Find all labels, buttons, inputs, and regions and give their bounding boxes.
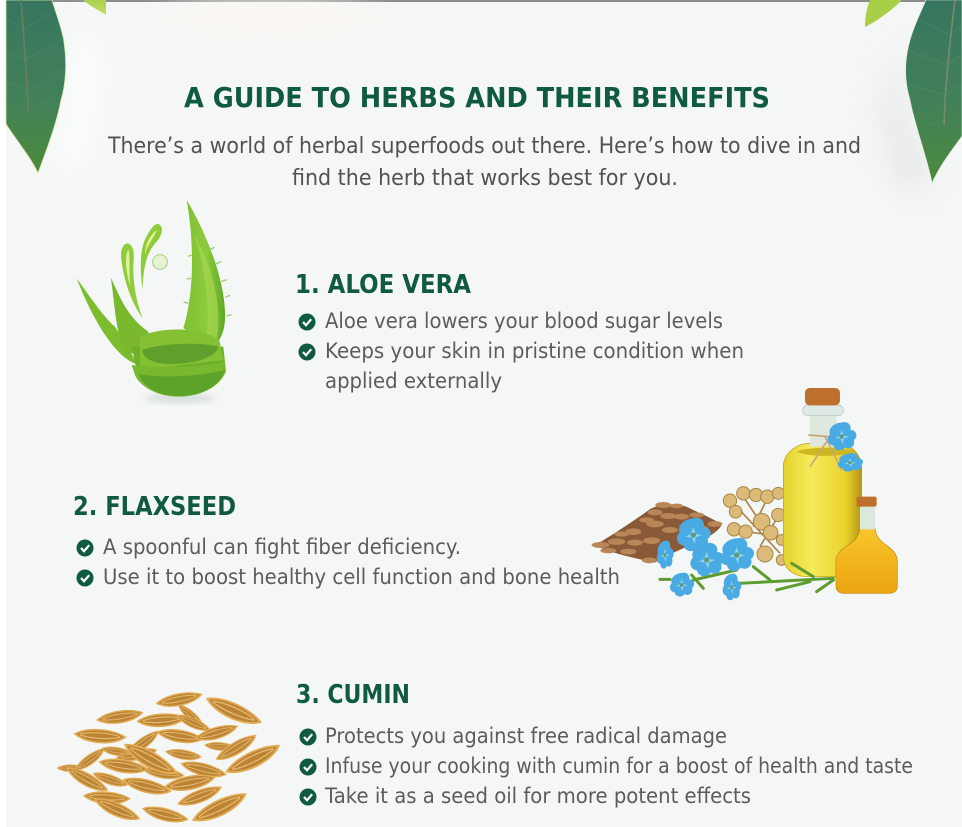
icon: left large leaf [6,0,66,173]
list: aloe vera benefits: applied externally [325,369,502,393]
blue flax flowers [657,422,863,600]
icon: right large leaf [906,0,962,183]
list: aloe vera benefits [298,309,744,393]
icon: aloe vera illustration [77,200,231,402]
heading: aloe vera: 1. ALOE VERA [295,270,471,300]
icon: right small lime leaf [865,0,902,27]
list: cumin benefits: Take it as a seed oil for more potent effects [324,784,751,808]
heading: flaxseed: 2. FLAXSEED [73,492,236,522]
title: A GUIDE TO HERBS AND THEIR BENEFITS [184,81,770,114]
list: flaxseed benefits: Use it to boost healthy cell function and bone health [103,565,620,589]
list: aloe vera benefits: Keeps your skin in pristine condition when [325,339,744,363]
list: aloe vera benefits: Aloe vera lowers your blood sugar levels [325,309,723,333]
heading: cumin: 3. CUMIN [296,680,410,710]
icon: flaxseed and oil illustration [592,388,897,600]
list: cumin benefits [300,724,913,808]
intro text: There’s a world of herbal superfoods out there. Here’s how to dive in and [107,134,861,159]
top header remnant strip [52,0,926,2]
icon: left small lime leaf [83,0,106,15]
small oil bottle [836,497,897,593]
intro text [107,134,861,191]
flax stems [660,563,833,592]
icon: cumin seeds illustration [57,689,284,827]
flaxseed pile [592,502,722,563]
intro text: find the herb that works best for you. [292,166,678,191]
list: flaxseed benefits: A spoonful can fight fiber deficiency. [103,535,461,559]
list: cumin benefits: Infuse your cooking with cumin for a boost of health and taste [325,754,913,778]
list: cumin benefits: Protects you against free radical damage [325,724,727,748]
large oil bottle [783,388,862,577]
list: flaxseed benefits [76,535,620,589]
dried seed pods [723,487,787,565]
